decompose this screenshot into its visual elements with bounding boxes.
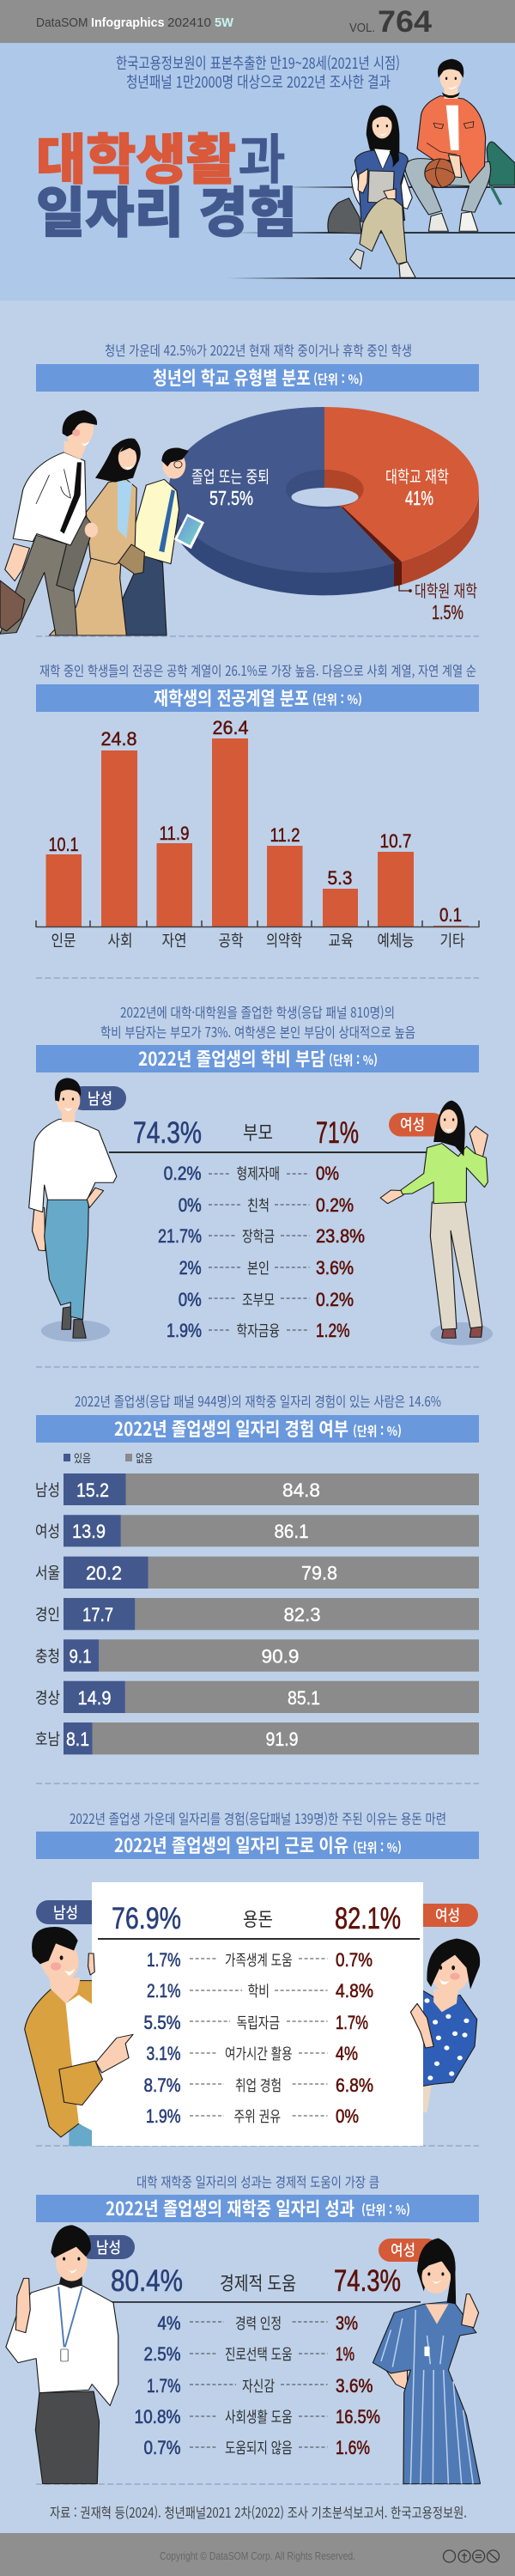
row: Chungcheong: 90.9: [261, 1645, 299, 1668]
row: career recognition: 4%: [158, 2312, 180, 2334]
woman hair: [95, 439, 141, 483]
section 1 banner: [36, 364, 479, 392]
section 6 banner: [36, 2195, 479, 2222]
row: career recognition: 경력 인정: [235, 2312, 282, 2334]
volume number: [349, 5, 433, 39]
section 3 subtitle: [100, 1001, 415, 1042]
section 2 banner: (단위 : %): [312, 690, 362, 708]
pill: female: 여성: [400, 1113, 425, 1135]
brand line: 202410: [167, 15, 211, 30]
bar categories: 의약학: [266, 929, 302, 951]
left man tie: [60, 462, 82, 534]
row: tuition: 학비: [247, 1980, 270, 2002]
label: university: [385, 463, 449, 509]
row: grandparents: 조부모: [242, 1289, 275, 1310]
left man arm: [5, 544, 29, 581]
legend: 있음: [74, 1449, 91, 1466]
row: tuition: 4.8%: [336, 1980, 373, 2002]
section 3 banner: [36, 1045, 479, 1072]
row: career recognition: [158, 2312, 358, 2334]
row: spare time: [146, 2043, 358, 2064]
pill: male: 남성: [88, 1087, 112, 1109]
row: grandparents: 0.2%: [316, 1289, 354, 1310]
bar values: 11.2: [270, 824, 300, 846]
right man tie: [159, 489, 175, 552]
row: family support: [147, 1949, 373, 1971]
row: recommendation: 주위 권유: [233, 2105, 281, 2127]
pill: male: [79, 2235, 135, 2259]
left man shirt: [13, 453, 86, 545]
row: Chungcheong: 충청: [35, 1645, 60, 1668]
section 4 banner: [36, 1415, 479, 1443]
row: recommendation: [146, 2105, 359, 2127]
stair lines: [227, 186, 515, 279]
man pockets: [427, 122, 474, 155]
left man trousers: [0, 535, 77, 635]
woman face: [118, 446, 136, 470]
row: spare time: 3.1%: [146, 2043, 180, 2064]
row: career choice: [144, 2343, 354, 2365]
row: relatives: [179, 1194, 354, 1216]
bar categories: 자연: [161, 929, 187, 951]
reasons card: [92, 1882, 423, 2146]
pill: female: [410, 1904, 478, 1927]
row: grandparents: 0%: [179, 1289, 202, 1310]
row: student loan: 1.2%: [316, 1320, 350, 1341]
row: Honam: [35, 1722, 479, 1754]
pill: female: [389, 1113, 445, 1137]
basketball: [425, 159, 456, 187]
orange slice: [324, 407, 479, 562]
bar values: 10.1: [48, 834, 79, 855]
row: Seoul: 서울: [35, 1561, 60, 1583]
row: social life: 사회생활 도움: [225, 2406, 293, 2427]
row: relatives: 0.2%: [316, 1194, 354, 1216]
pill: female: 여성: [435, 1904, 460, 1926]
row: scholarship: [158, 1225, 365, 1247]
row: female: 13.9: [72, 1521, 106, 1542]
woman bag: [118, 544, 144, 574]
illustration: hands over card: [59, 1953, 433, 2105]
man trousers: [404, 159, 491, 215]
row: grandparents: [179, 1289, 354, 1310]
row: Chungcheong: 9.1: [69, 1645, 91, 1668]
bar values: 0.1: [439, 904, 462, 926]
right man shirt: [131, 479, 179, 564]
row: pocket money: 76.9%: [112, 1902, 181, 1935]
row: job experience: 취업 경험: [235, 2075, 282, 2096]
section 4 banner: 2022년 졸업생의 일자리 경험 여부: [114, 1415, 348, 1442]
section 1 banner: 청년의 학교 유형별 분포: [153, 364, 311, 391]
row: confidence: 자신감: [242, 2375, 275, 2397]
row: independence fund: 독립자금: [237, 2012, 280, 2033]
row: self: 3.6%: [316, 1257, 354, 1279]
man neck and head: [444, 86, 457, 99]
footer bar: [0, 2533, 515, 2576]
row: financial help: [111, 2264, 401, 2298]
section 5 banner: [36, 1832, 479, 1859]
row: siblings: 0.2%: [164, 1163, 202, 1184]
right man head: [162, 452, 185, 479]
copyright: Copyright © DataSOM Corp. All Rights Reserved.: [160, 2550, 355, 2562]
row: social life: 16.5%: [336, 2406, 380, 2427]
row: Gyeongin: 82.3: [283, 1604, 321, 1625]
pill: male: 남성: [96, 2236, 121, 2258]
row: confidence: [147, 2375, 373, 2397]
side wall: [170, 489, 394, 595]
stacked bar chart: work experience: [35, 1473, 479, 1754]
row: financial help: 80.4%: [111, 2264, 183, 2298]
hand on coat: [85, 523, 98, 538]
backpack: [487, 142, 515, 185]
bars: [46, 738, 469, 927]
row: independence fund: [144, 2012, 368, 2033]
label: graduate school: [399, 577, 477, 623]
woman sleeves: [351, 163, 370, 206]
illustration: three walking office workers: [0, 410, 204, 635]
briefcase: [0, 580, 25, 631]
right man trousers: [87, 554, 167, 635]
bar categories: 교육: [328, 929, 354, 951]
section 4 subtitle: 2022년 졸업생(응답 패널 944명)의 재학중 일자리 경험이 있는 사람은 14.6%: [75, 1390, 441, 1411]
row: self: 2%: [179, 1257, 202, 1279]
row: Gyeongin: 17.7: [82, 1604, 113, 1625]
row: not helpful: 도움되지 않음: [225, 2437, 293, 2458]
section 2 banner: [36, 684, 479, 712]
row: female: 86.1: [275, 1521, 309, 1542]
row: Chungcheong: [35, 1639, 479, 1672]
results rule line: [110, 2301, 421, 2303]
man shoes: [428, 213, 448, 231]
row: career choice: 진로선택 도움: [225, 2343, 293, 2365]
pill: male: [70, 1086, 126, 1110]
row: independence fund: 5.5%: [144, 2012, 180, 2033]
woman trousers: [49, 552, 126, 635]
row: not helpful: [144, 2437, 370, 2458]
section 1 subtitle: 청년 가운데 42.5%가 2022년 현재 재학 중이거나 휴학 중인 학생: [105, 339, 412, 360]
bag: [328, 198, 361, 234]
bar categories: 인문: [52, 929, 76, 951]
row: student loan: 1.9%: [167, 1320, 202, 1341]
row: Honam: 8.1: [66, 1728, 89, 1750]
illustration: man behind card: [25, 1927, 99, 2146]
row: independence fund: 1.7%: [336, 2012, 368, 2033]
section 5 banner: 2022년 졸업생의 일자리 근로 이유: [114, 1832, 348, 1858]
maroon slice: [324, 489, 402, 563]
illustration: man with lanyard: [6, 2225, 118, 2484]
pill: male: 남성: [53, 1901, 78, 1923]
row: student loan: [167, 1320, 350, 1341]
woman vest: [354, 150, 408, 222]
row: Seoul: 20.2: [86, 1563, 122, 1583]
woman trousers: [360, 197, 407, 264]
pill: male: [36, 1900, 105, 1924]
volume number: VOL.: [349, 21, 375, 35]
row: parents: 부모: [243, 1118, 273, 1145]
row: siblings: [164, 1163, 339, 1184]
section 3 banner: (단위 : %): [329, 1051, 378, 1069]
illustration: standing woman: [380, 1101, 493, 1346]
woman shoes: [350, 249, 364, 269]
brand line: DataSOM: [36, 15, 88, 30]
bar chart: major distribution: [36, 717, 479, 951]
label: graduated: 57.5%: [209, 487, 253, 509]
woman hands: [358, 169, 368, 193]
row: pocket money: [112, 1902, 401, 1935]
row: social life: 10.8%: [134, 2406, 180, 2427]
brand line: Infographics: [91, 15, 165, 30]
row: spare time: 4%: [336, 2043, 358, 2064]
hero intro text: 한국고용정보원이 표본추출한 만19~28세(2021년 시점): [116, 52, 400, 74]
row: parents: [133, 1116, 359, 1150]
row: job experience: [144, 2075, 373, 2096]
row: relatives: 0%: [179, 1194, 202, 1216]
row: female: 여성: [35, 1520, 60, 1542]
main title: 과: [238, 117, 286, 195]
results table: [111, 2264, 401, 2458]
top header bar: [0, 0, 515, 43]
brand line: 5W: [215, 15, 234, 30]
row: Gyeongsang: 14.9: [77, 1687, 112, 1709]
bar values: 24.8: [101, 728, 137, 750]
woman hair: [367, 105, 399, 169]
section 5 banner: (단위 : %): [353, 1838, 402, 1856]
row: recommendation: 0%: [336, 2105, 359, 2127]
label: graduated: [191, 463, 270, 509]
row: financial help: 경제적 도움: [220, 2269, 296, 2296]
bar values: 10.7: [379, 830, 412, 852]
row: confidence: 1.7%: [147, 2375, 180, 2397]
bar categories: 예체능: [378, 929, 414, 951]
illustration: woman behind card: [421, 1939, 480, 2112]
donut hole: [286, 470, 363, 509]
blue slice: [169, 407, 395, 573]
axis: [36, 920, 479, 927]
woman shirt: [118, 478, 132, 538]
row: male: 84.8: [282, 1479, 320, 1501]
row: female: [35, 1515, 479, 1546]
row: family support: 0.7%: [336, 1949, 373, 1971]
label: graduate school: 1.5%: [432, 601, 464, 623]
man tee: [446, 106, 459, 150]
row: Gyeongsang: 경상: [35, 1686, 60, 1709]
main title: [36, 117, 297, 248]
row: tuition: 2.1%: [147, 1980, 180, 2002]
row: Honam: 호남: [35, 1728, 60, 1750]
row: spare time: 여가시간 활용: [225, 2043, 293, 2064]
section 3 subtitle: 학비 부담자는 부모가 73%. 여학생은 본인 부담이 상대적으로 높음: [100, 1021, 415, 1042]
row: not helpful: 1.6%: [336, 2437, 370, 2458]
label: graduated: 졸업 또는 중퇴: [191, 463, 270, 488]
section 4 banner: (단위 : %): [353, 1422, 402, 1440]
row: Gyeongin: [35, 1598, 479, 1630]
row: self: 본인: [247, 1257, 270, 1279]
row: parents: 71%: [316, 1116, 359, 1150]
row: scholarship: 장학금: [242, 1225, 275, 1247]
row: Gyeongin: 경인: [35, 1603, 60, 1625]
row: parents: 74.3%: [133, 1116, 202, 1150]
hero intro text: 청년패널 1만2000명 대상으로 2022년 조사한 결과: [126, 70, 391, 93]
icon: creative commons badges: [443, 2550, 500, 2562]
row: pocket money: 82.1%: [335, 1902, 401, 1935]
main title: 일자리 경험: [36, 170, 297, 248]
hero intro text: [116, 52, 400, 93]
row: Seoul: [35, 1557, 479, 1589]
brand line: [36, 15, 234, 30]
woman jacket: [86, 479, 136, 564]
pill: female: 여성: [391, 2239, 415, 2261]
illustration: standing man: [29, 1078, 117, 1342]
bar categories: 공학: [218, 929, 244, 951]
section 6 banner: (단위 : %): [361, 2201, 410, 2219]
legend: 없음: [136, 1449, 153, 1466]
row: recommendation: 1.9%: [146, 2105, 180, 2127]
row: siblings: 형제자매: [237, 1163, 280, 1184]
bar values: [48, 717, 462, 926]
row: family support: 가족생계 도움: [225, 1949, 293, 1971]
man jacket: [417, 96, 486, 183]
row: social life: [134, 2406, 380, 2427]
row: self: [179, 1257, 354, 1279]
row: pocket money: 용돈: [243, 1905, 273, 1932]
row: Gyeongsang: 85.1: [288, 1687, 320, 1709]
section 6 banner: 2022년 졸업생의 재학중 일자리 성과: [106, 2195, 354, 2221]
left man neck and head: [64, 440, 86, 459]
row: job experience: 6.8%: [336, 2075, 373, 2096]
bar categories: 기타: [439, 929, 465, 951]
row: Seoul: 79.8: [301, 1563, 337, 1583]
tablet: [368, 171, 394, 203]
section 3 banner: 2022년 졸업생의 학비 부담: [138, 1045, 325, 1072]
hero panel: [0, 43, 515, 301]
row: Gyeongsang: [35, 1681, 479, 1713]
row: male: 남성: [35, 1479, 60, 1501]
donut chart: school type distribution: [169, 407, 479, 623]
bar categories: 사회: [108, 929, 132, 951]
row: family support: 1.7%: [147, 1949, 180, 1971]
row: Honam: 91.9: [266, 1728, 299, 1750]
row: career recognition: 3%: [336, 2312, 358, 2334]
illustration: woman with striped dress: [373, 2239, 481, 2484]
bar categories: [52, 929, 465, 951]
tuition table: [133, 1116, 365, 1341]
row: student loan: 학자금융: [237, 1320, 280, 1341]
row: scholarship: 23.8%: [316, 1225, 365, 1247]
label: university: 대학교 재학: [385, 463, 449, 488]
row: financial help: 74.3%: [334, 2264, 401, 2298]
tablet: [174, 513, 204, 549]
row: male: [35, 1473, 479, 1505]
row: job experience: 8.7%: [144, 2075, 180, 2096]
volume number: 764: [378, 5, 433, 39]
row: not helpful: 0.7%: [144, 2437, 180, 2458]
label: university: 41%: [405, 487, 433, 509]
row: relatives: 친척: [247, 1194, 270, 1216]
legend: [64, 1449, 153, 1466]
row: career choice: 1%: [336, 2343, 354, 2365]
section 5 subtitle: 2022년 졸업생 가운데 일자리를 경험(응답패널 139명)한 주된 이유는 용돈 마련: [70, 1807, 446, 1828]
main title: 대학생활: [36, 117, 236, 195]
row: confidence: 3.6%: [336, 2375, 373, 2397]
illustration: students sitting on steps: [328, 59, 515, 277]
row: scholarship: 21.7%: [158, 1225, 202, 1247]
tuition rule line: [109, 1151, 427, 1153]
row: male: 15.2: [76, 1479, 109, 1501]
man hand: [448, 155, 462, 178]
pill: female: [379, 2239, 439, 2262]
section 1 banner: (단위 : %): [313, 370, 363, 388]
bar values: 26.4: [213, 717, 249, 738]
bar values: 11.9: [160, 823, 189, 844]
bar values: 5.3: [328, 867, 352, 889]
row: siblings: 0%: [316, 1163, 339, 1184]
woman face: [373, 113, 392, 138]
label: graduate school: 대학원 재학: [415, 577, 477, 602]
section 3 subtitle: 2022년에 대학·대학원을 졸업한 학생(응답 패널 810명)의: [120, 1001, 395, 1022]
row: tuition: [147, 1980, 373, 2002]
carried coat: [57, 517, 94, 591]
row: career choice: 2.5%: [144, 2343, 180, 2365]
section 2 banner: 재학생의 전공계열 분포: [154, 684, 309, 711]
section 6 subtitle: 대학 재학중 일자리의 성과는 경제적 도움이 가장 큼: [136, 2171, 379, 2191]
